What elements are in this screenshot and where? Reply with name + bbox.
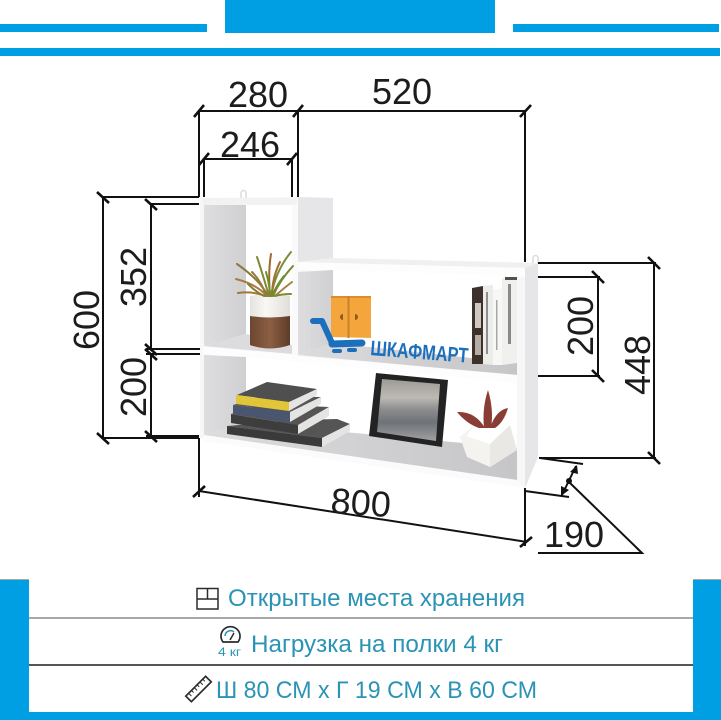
- orange cabinet logo: [331, 296, 371, 338]
- brand text: ШКАФМАРТ: [370, 337, 469, 368]
- 200 left dimension: [113, 349, 200, 442]
- picture frame: [369, 373, 448, 447]
- 200 right dimension: 200: [560, 296, 601, 356]
- 800 dimension: 800: [329, 480, 392, 525]
- 800 dimension: [193, 438, 532, 547]
- 448 dimension: [538, 257, 660, 464]
- stacked books: [227, 382, 350, 447]
- row: shelf load: Нагрузка на полки 4 кг: [251, 631, 503, 658]
- shelf body: [200, 197, 538, 488]
- 600 dimension: [66, 192, 199, 444]
- 352 dimension: 352: [113, 247, 154, 307]
- 520 dimension: [298, 71, 531, 262]
- icon: load gauge: [218, 627, 242, 659]
- 520 dimension: 520: [372, 71, 432, 112]
- hanging loops: [241, 191, 538, 263]
- shelf unit: [200, 191, 538, 488]
- upright books: [472, 277, 517, 365]
- row: open storage: Открытые места хранения: [228, 585, 525, 612]
- white vase with red plant: [457, 390, 517, 467]
- plant in pot: [236, 252, 293, 348]
- icon: open storage: [197, 588, 218, 609]
- 200 left dimension: 200: [113, 357, 154, 417]
- 246 dimension: [199, 124, 297, 197]
- 190 dimension: 190: [544, 514, 604, 555]
- 352 dimension: [113, 199, 200, 355]
- icon: ruler: [186, 676, 211, 702]
- 448 dimension: 448: [617, 335, 658, 395]
- 280 dimension: 280: [228, 74, 288, 115]
- 200 right dimension: [538, 271, 604, 382]
- features panel: [0, 579, 721, 720]
- top header decoration: [0, 0, 720, 56]
- icon: load gauge: 4 кг: [218, 645, 242, 659]
- blue cart logo: [313, 321, 362, 351]
- 600 dimension: 600: [66, 290, 107, 350]
- row: dimensions: Ш 80 СМ х Г 19 СМ х В 60 СМ: [216, 677, 537, 704]
- 280 dimension: [194, 74, 303, 197]
- 246 dimension: 246: [220, 124, 280, 165]
- 190 dimension: [525, 458, 642, 555]
- dimension lines: [66, 71, 660, 555]
